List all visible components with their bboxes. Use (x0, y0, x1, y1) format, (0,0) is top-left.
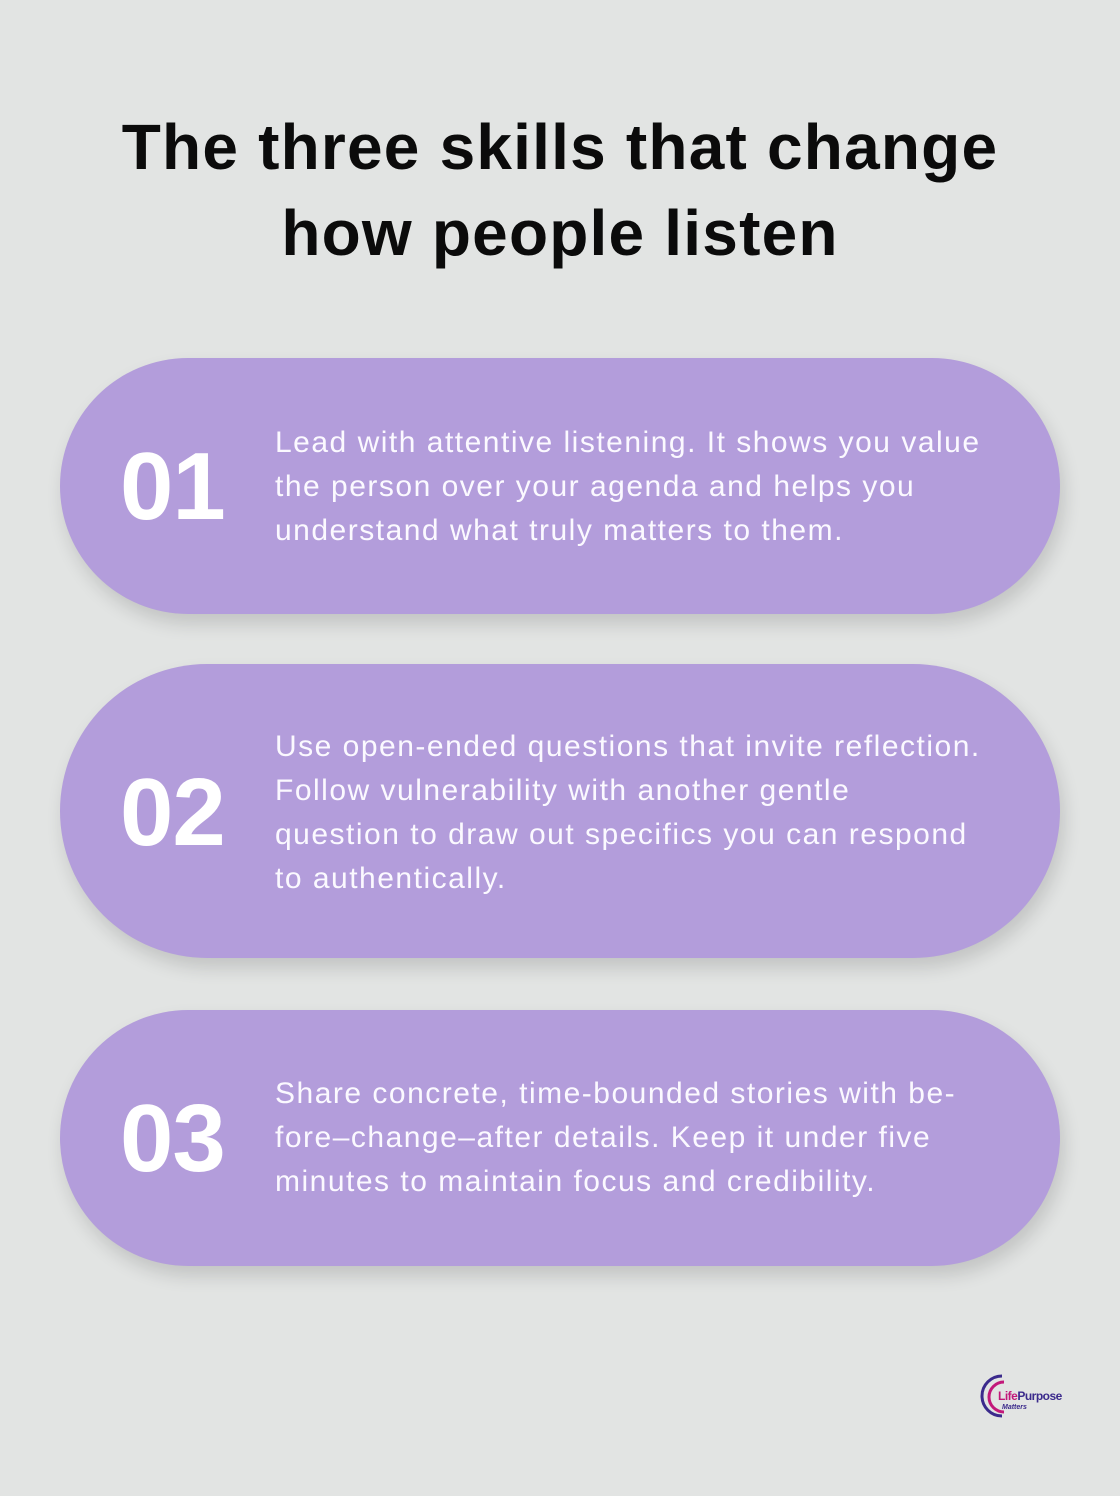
logo (980, 1374, 1063, 1418)
title: how people listen (281, 197, 839, 269)
text 03 (275, 1077, 956, 1198)
text 01 (275, 426, 981, 547)
text 02: to authentically. (275, 862, 507, 895)
panel: skill 01 (60, 358, 1060, 614)
number 02: 02 (120, 759, 225, 866)
text 02: Follow vulnerability with another gentle (275, 774, 850, 807)
number 01: 01 (120, 433, 225, 540)
text 03: fore–change–after details. Keep it under five (275, 1121, 931, 1154)
number 03: 03 (120, 1085, 225, 1192)
text 02: Use open-ended questions that invite reflection. (275, 730, 981, 763)
panel: skill 02 (60, 664, 1060, 958)
text 03: minutes to maintain focus and credibility. (275, 1165, 876, 1198)
text 01: the person over your agenda and helps you (275, 470, 915, 503)
logo: LifePurpose (998, 1389, 1063, 1403)
logo: Matters (1002, 1404, 1027, 1411)
title: The three skills that change (122, 111, 998, 183)
text 02: question to draw out specifics you can respond (275, 818, 968, 851)
text 03: Share concrete, time-bounded stories with be- (275, 1077, 956, 1110)
panel: skill 03 (60, 1010, 1060, 1266)
text 01: Lead with attentive listening. It shows you value (275, 426, 981, 459)
title (122, 111, 998, 269)
text 01: understand what truly matters to them. (275, 514, 844, 547)
text 02 (275, 730, 981, 895)
